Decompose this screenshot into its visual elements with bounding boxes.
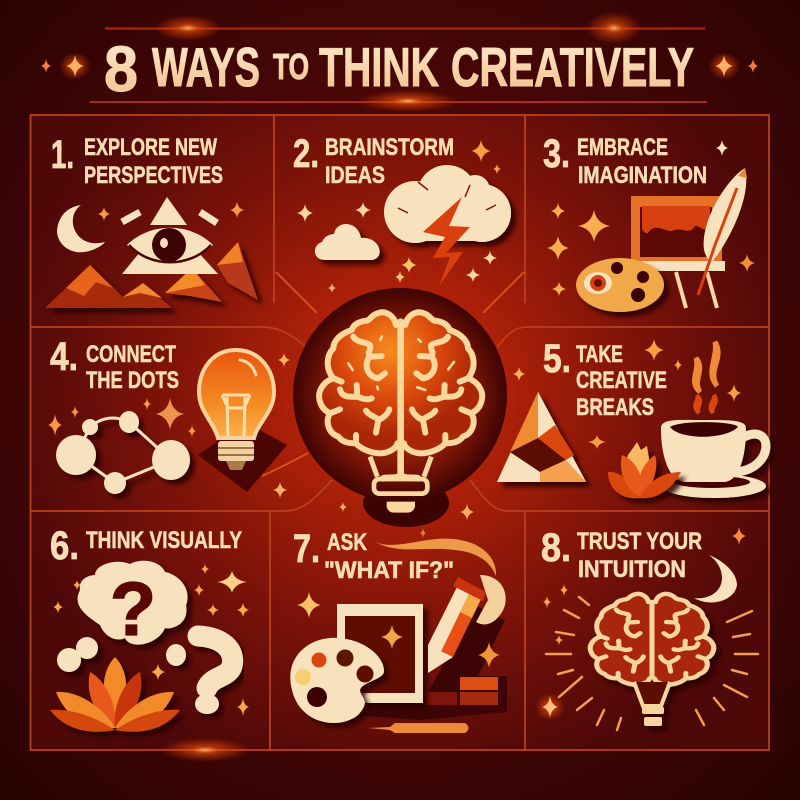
number: 6.: [50, 524, 79, 568]
center sparkles: [273, 283, 525, 520]
sparkles: [588, 339, 741, 449]
panel 2: brainstorm ideas: [293, 132, 511, 286]
heading: CONNECT: [86, 341, 176, 368]
heading: ASK: [327, 529, 368, 556]
icon: mountains: [45, 242, 258, 308]
icon: small cloud: [315, 224, 380, 260]
icon: big question mark: [195, 636, 233, 714]
heading: IDEAS: [325, 162, 385, 189]
title text: WAYS: [152, 36, 260, 98]
heading: TRUST YOUR: [577, 528, 702, 555]
heading: EXPLORE NEW: [84, 134, 217, 161]
heading: INTUITION: [578, 556, 686, 583]
icon: dark shadow under pencil and bricks: [365, 605, 507, 720]
icon: paintbrush: [368, 723, 468, 733]
number: 5.: [543, 337, 571, 381]
panel 3: embrace imagination: [543, 132, 755, 312]
icon: swoosh: [375, 539, 496, 576]
number: 4.: [50, 335, 78, 379]
icon: lotus flame: [608, 442, 681, 498]
sparkles: [53, 564, 249, 716]
icon: coffee cup: [661, 420, 766, 498]
icon: shadow behind bulb: [198, 422, 287, 492]
sparkles: [535, 527, 746, 721]
heading: IMAGINATION: [578, 162, 707, 189]
icon: moon: [57, 205, 105, 252]
icon: palette: [290, 638, 384, 723]
icon: steam: [695, 342, 718, 413]
frame panel background: [30, 115, 769, 750]
panel 7: ask what if: [290, 527, 507, 733]
heading: PERSPECTIVES: [84, 162, 223, 189]
icon: connected dots: [56, 411, 190, 494]
sparkles: [547, 140, 755, 296]
frame and dividers: [30, 115, 769, 750]
icon: diamond in canvas: [381, 625, 403, 649]
title text: 8: [104, 33, 138, 105]
heading: EMBRACE: [577, 134, 668, 161]
icon: big cloud with lightning: [384, 165, 511, 286]
icon: thought cloud: [57, 561, 188, 672]
sparkles: [297, 528, 500, 668]
panel 8: trust your intuition: [535, 526, 758, 730]
central brain bulb: [273, 283, 525, 527]
heading: "WHAT IF?": [324, 557, 454, 584]
icon: canvas on easel: [631, 196, 725, 308]
heading: [577, 528, 702, 583]
icon: feather: [698, 168, 747, 295]
glow line: bottom: [90, 90, 707, 112]
number: 3.: [543, 132, 570, 176]
heading: THE DOTS: [86, 367, 179, 394]
heading: BREAKS: [576, 394, 654, 421]
icon: lotus: [50, 657, 180, 732]
icon: question mark in cloud: ?: [110, 567, 156, 652]
heading: [324, 529, 454, 584]
number: 2.: [293, 132, 319, 176]
sparkles: [98, 202, 244, 221]
title block: [41, 12, 758, 112]
icon: canvas frame: [337, 604, 423, 703]
icon: light bulb: [199, 350, 274, 470]
bottom glow: [160, 738, 250, 762]
rays: [546, 597, 758, 730]
icon: pyramid: [497, 392, 586, 482]
heading: BRAINSTORM: [325, 134, 454, 161]
number: 8.: [541, 526, 571, 570]
heading: THINK VISUALLY: [86, 527, 242, 554]
dark halo circle: [293, 288, 507, 527]
heading: [84, 134, 223, 189]
number: 1.: [51, 133, 74, 177]
heading: [325, 134, 454, 189]
icon: bricks: [425, 677, 498, 705]
number: 7.: [293, 527, 320, 571]
heading: [86, 341, 179, 394]
heading: CREATIVE: [576, 367, 667, 394]
heading: [577, 134, 707, 189]
title text: THINK: [319, 36, 439, 98]
heading: TAKE: [576, 341, 623, 368]
panel 1: explore new perspectives: [45, 133, 258, 308]
icon: moon: [694, 555, 737, 602]
title text: CREATIVELY: [451, 36, 694, 98]
sparkles: [297, 140, 501, 283]
icon: palette: [576, 258, 664, 312]
heading: [576, 341, 667, 421]
title text: TO: [273, 46, 309, 87]
title text: [104, 33, 694, 105]
brain lightbulb: [319, 312, 482, 513]
panel 6: think visually: [50, 524, 249, 732]
panel 5: take creative breaks: [497, 337, 766, 498]
glow line: top: [105, 12, 705, 44]
icon: pencil: [428, 575, 506, 673]
panel 4: connect the dots: [48, 335, 287, 494]
title sparkles: [41, 52, 758, 80]
icon: small brain bulb: [590, 594, 714, 726]
sparkles: [48, 398, 196, 437]
icon: all-seeing eye: [122, 197, 218, 274]
